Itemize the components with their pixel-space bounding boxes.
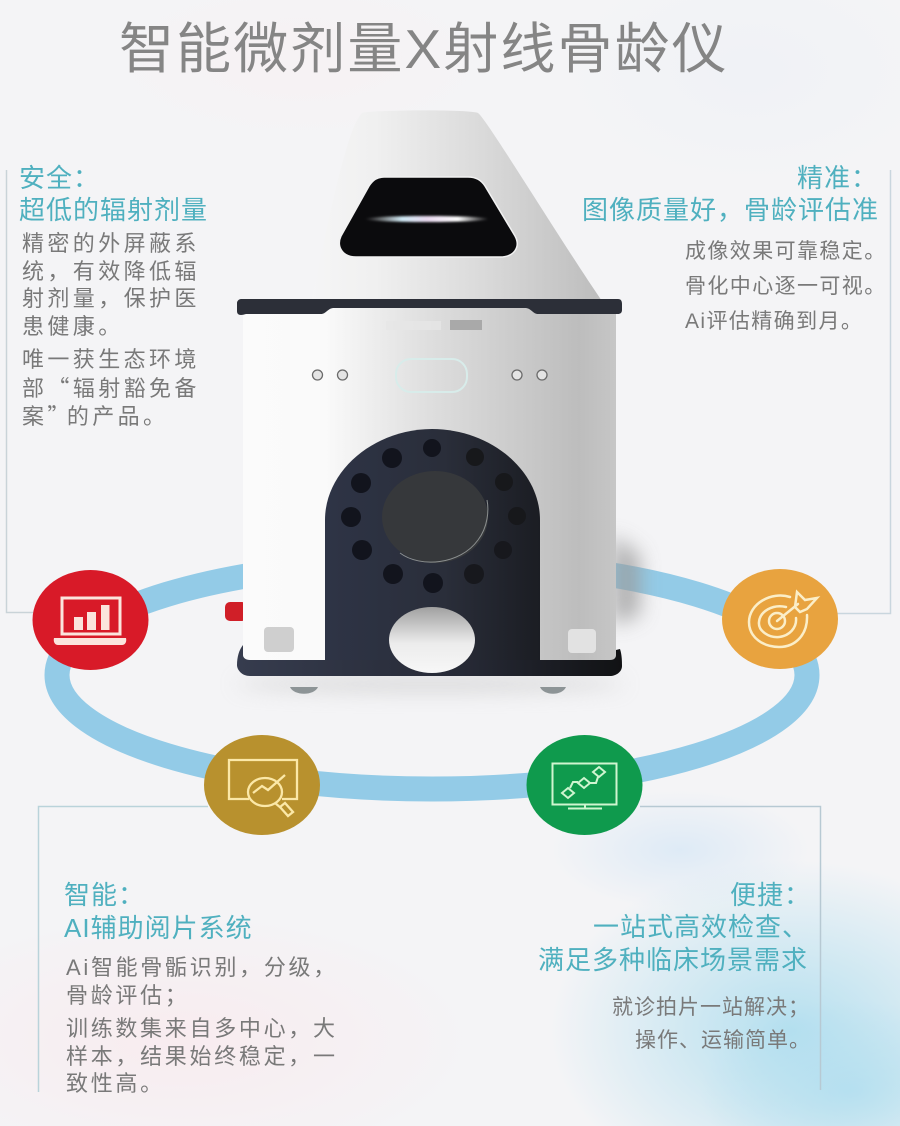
main body (243, 308, 616, 660)
body text: precision: 成像效果可靠稳定。 (685, 240, 887, 263)
heading: precision: 精准： (797, 163, 878, 193)
device shadow (612, 535, 640, 625)
panel outline: convenience (640, 806, 820, 1090)
badge: green monitor (526, 735, 642, 835)
sensor dots (341, 439, 526, 593)
viewing window (339, 177, 517, 257)
badge: gold magnifier (204, 735, 320, 835)
body text: intelligence: 样本，结果始终稳定，一 (66, 1044, 338, 1068)
heading: safety: 安全： (19, 163, 100, 193)
heading: convenience: 便捷： (730, 880, 811, 910)
top bar (237, 299, 622, 315)
body text: safety: 精密的外屏蔽系 (22, 231, 200, 256)
body text: convenience: 操作、运输简单。 (635, 1029, 811, 1052)
panel outline: safety (6, 170, 36, 612)
body text: intelligence: 骨龄评估； 训练数集来自多中心，大 (66, 982, 338, 1041)
body text: convenience: 就诊拍片一站解决； (612, 996, 810, 1019)
body text: safety: 射剂量，保护医 (22, 286, 200, 311)
title: 智能微剂量X射线骨龄仪 (119, 18, 729, 80)
subheading: clinical scenarios: 满足多种临床场景需求 (538, 945, 808, 975)
panel outline: intelligence (38, 806, 208, 1092)
badge: red laptop chart (32, 570, 148, 670)
body text: intelligence: Ai智能骨骺识别，分级， (66, 955, 338, 980)
body text: precision (685, 240, 887, 333)
body text: precision: 骨化中心逐一可视。 (685, 275, 887, 298)
touch panel (396, 359, 467, 392)
subheading: one-stop exam: 一站式高效检查、 (593, 912, 809, 942)
logo (386, 320, 482, 330)
panel: intelligence (64, 880, 338, 1096)
panel: convenience (538, 880, 811, 1052)
heading: intelligence: 智能： (64, 880, 145, 910)
device: X-ray bone age scanner (225, 110, 622, 694)
subheading: image quality: 图像质量好，骨龄评估准 (582, 195, 879, 225)
window light bar (365, 216, 489, 222)
central lens (382, 471, 488, 563)
orbit ring (57, 561, 807, 789)
body text: safety: 患健康。 唯一获生态环境 (22, 314, 200, 372)
subheading: ultra-low dose: 超低的辐射剂量 (19, 195, 208, 225)
panel outline: precision (832, 170, 890, 614)
body text: safety (22, 231, 200, 431)
body text: convenience (612, 996, 811, 1052)
device feet (290, 687, 318, 694)
body text: safety: 统，有效降低辐 (22, 259, 200, 284)
upper cone (310, 110, 604, 305)
emergency button (225, 602, 247, 621)
body text: safety: 案”的产品。 (22, 399, 168, 431)
body text: intelligence: 致性高。 (66, 1071, 165, 1096)
body text: intelligence (66, 955, 338, 1096)
body text: safety: 部“辐射豁免备 (22, 371, 200, 403)
panel: safety (19, 163, 208, 431)
body text: precision: Ai评估精确到月。 (685, 310, 863, 333)
arch panel (325, 429, 540, 665)
indicator lights (312, 370, 547, 380)
right vent square (568, 629, 596, 653)
base (237, 645, 622, 676)
patient opening (389, 607, 475, 673)
panel: precision (582, 163, 887, 333)
subheading: AI reading system: AI辅助阅片系统 (64, 913, 253, 943)
left vent square (264, 627, 294, 652)
badge: orange target (722, 569, 838, 669)
